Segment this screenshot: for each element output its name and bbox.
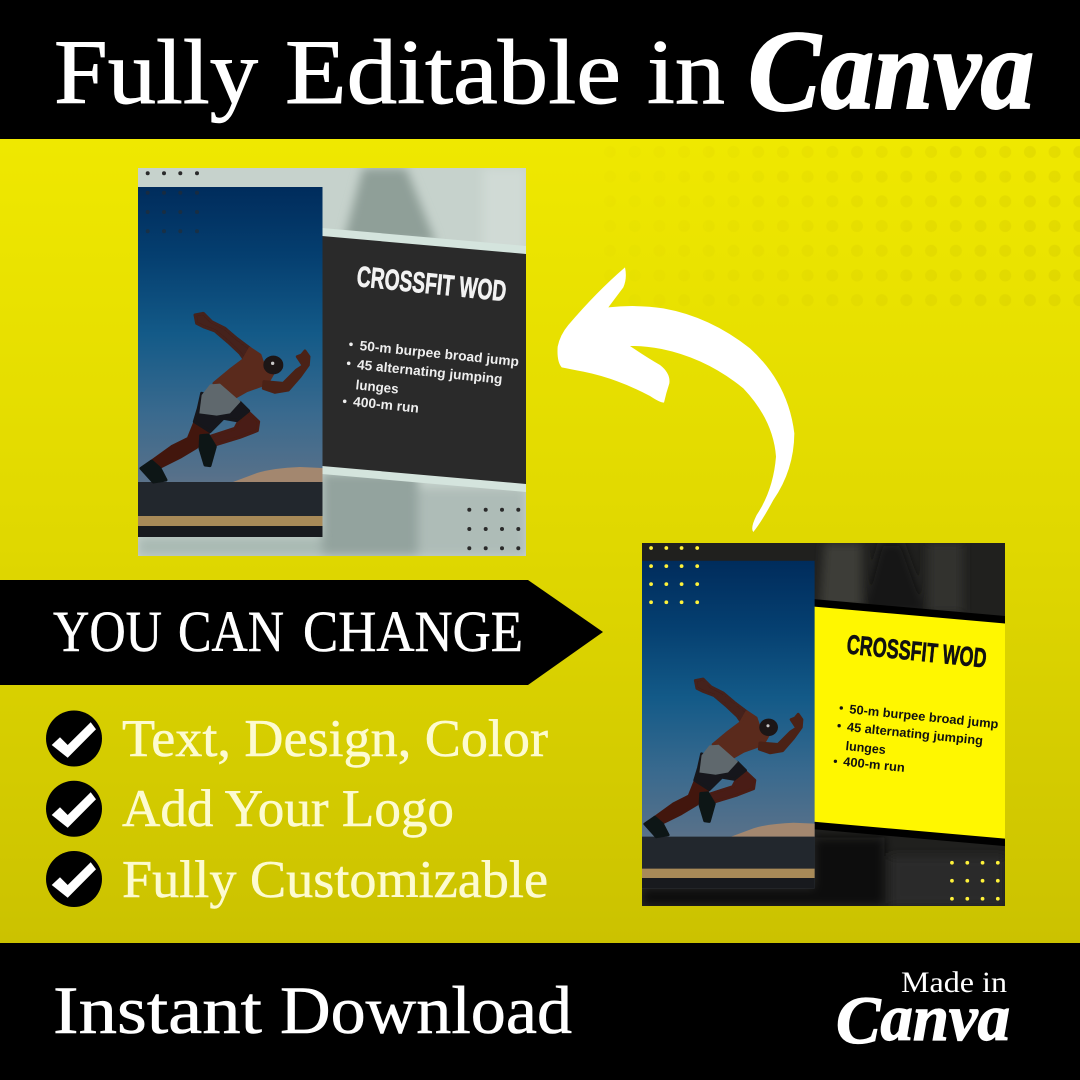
workout list	[834, 702, 999, 775]
athlete photo	[138, 187, 322, 537]
card heading: CROSSFIT WOD	[845, 629, 988, 674]
workout list: 50-m burpee broad jump	[359, 338, 520, 369]
workout list	[343, 338, 520, 416]
black stripes behind panel	[814, 599, 1005, 846]
workout list: 50-m burpee broad jump	[849, 702, 999, 731]
workout list: 400-m run	[352, 394, 420, 416]
text: Made in: Made in	[901, 966, 1007, 999]
dot grid bottom right	[950, 861, 1000, 901]
large Canva wordmark: anva	[820, 6, 1034, 133]
banner: YOU CAN CHANGE	[0, 580, 603, 685]
workout list: lunges	[845, 739, 886, 757]
title: Fully Editable in: in	[647, 21, 725, 123]
light stripes behind panel	[322, 228, 526, 492]
feature: Text, Design, Color: Text, Design, Color	[122, 710, 548, 768]
workout list: 45 alternating jumping	[356, 357, 503, 387]
text: Instant Download	[53, 972, 572, 1048]
dot grid top left	[649, 546, 699, 604]
card: light version of CrossFit template	[138, 168, 526, 556]
curved white arrow	[557, 267, 794, 532]
workout list: lunges	[355, 377, 399, 397]
yellow text panel	[814, 607, 1005, 839]
athlete photo	[642, 561, 815, 888]
title: Fully Editable in	[54, 21, 725, 123]
small Canva wordmark: C	[836, 982, 881, 1058]
card: yellow and black version of CrossFit template	[642, 543, 1005, 906]
title: Fully Editable in: Fully	[54, 21, 258, 123]
top title bar	[0, 0, 1080, 139]
workout list: 45 alternating jumping	[846, 720, 984, 748]
yellow gradient background	[0, 139, 1080, 943]
feature: Add Your Logo: Add Your Logo	[122, 780, 454, 838]
feature: Fully Customizable: Fully Customizable	[122, 851, 548, 909]
dot grid bottom right	[467, 508, 520, 550]
halftone dot texture	[901, 146, 1080, 306]
title: Fully Editable in: Editable	[285, 21, 621, 123]
banner: YOU CAN CHANGE: CAN	[178, 599, 284, 664]
dark text panel	[322, 236, 526, 484]
card background photo	[138, 168, 526, 556]
banner: YOU CAN CHANGE: CHANGE	[303, 599, 523, 664]
text: Instant Download: Instant	[53, 972, 262, 1048]
bottom bar	[0, 943, 1080, 1080]
text: Instant Download: Download	[280, 972, 572, 1048]
large Canva wordmark: C	[748, 8, 822, 136]
dot grid top left	[146, 171, 199, 233]
banner: YOU CAN CHANGE: YOU	[53, 599, 162, 664]
small Canva wordmark: anva	[881, 982, 1010, 1055]
card heading: CROSSFIT WOD	[355, 261, 508, 308]
workout list: 400-m run	[843, 755, 905, 775]
card background photo	[642, 543, 1005, 906]
feature list	[46, 710, 548, 909]
